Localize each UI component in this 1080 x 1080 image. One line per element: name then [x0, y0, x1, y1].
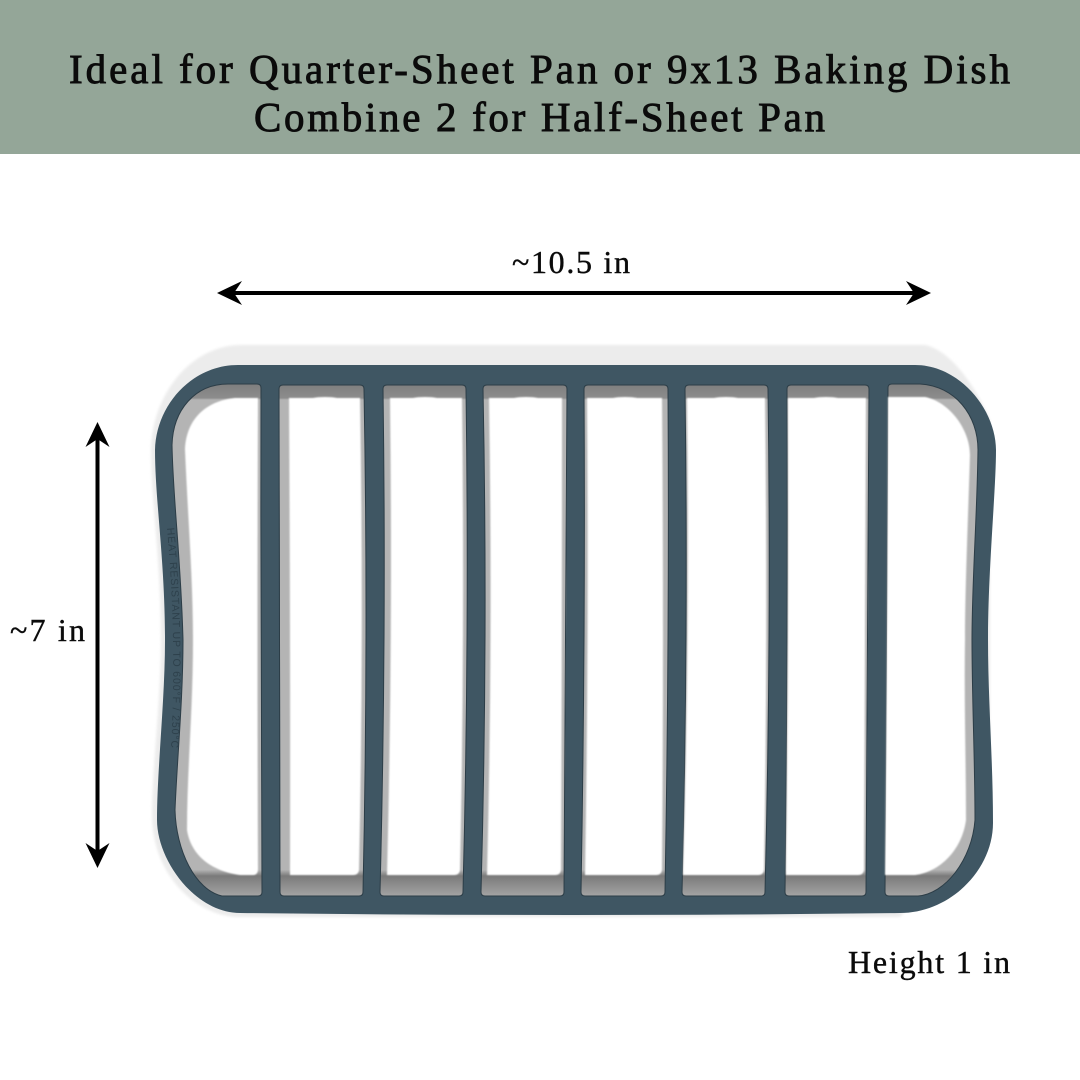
arrow: length: [86, 422, 110, 868]
opening 8: [885, 384, 978, 896]
rack shadow: [151, 345, 990, 917]
rack openings: [172, 384, 978, 896]
opening 5: [581, 385, 668, 896]
height dimension: [10, 422, 110, 868]
width label: ~10.5 in: [512, 244, 630, 280]
opening 3: [380, 385, 467, 896]
opening 7: [785, 385, 869, 896]
embossed temperature text: HEAT RESISTANT UP TO 600°F / 250°C: [167, 528, 180, 748]
opening 6: [682, 385, 769, 896]
length label: ~7 in: [10, 612, 85, 648]
title line 2: Combine 2 for Half-Sheet Pan: [254, 94, 825, 140]
silicone rack photo: [151, 345, 996, 917]
title line 1: Ideal for Quarter-Sheet Pan or 9x13 Baking Dish: [69, 46, 1010, 92]
rack frame: [155, 365, 996, 915]
opening 2: [279, 385, 366, 896]
arrow: width: [217, 281, 931, 305]
opening 4: [481, 385, 567, 896]
header banner: [0, 0, 1080, 154]
width dimension: [217, 244, 931, 305]
opening 1: [172, 384, 262, 896]
rack height note: Height 1 in: [848, 944, 1010, 980]
